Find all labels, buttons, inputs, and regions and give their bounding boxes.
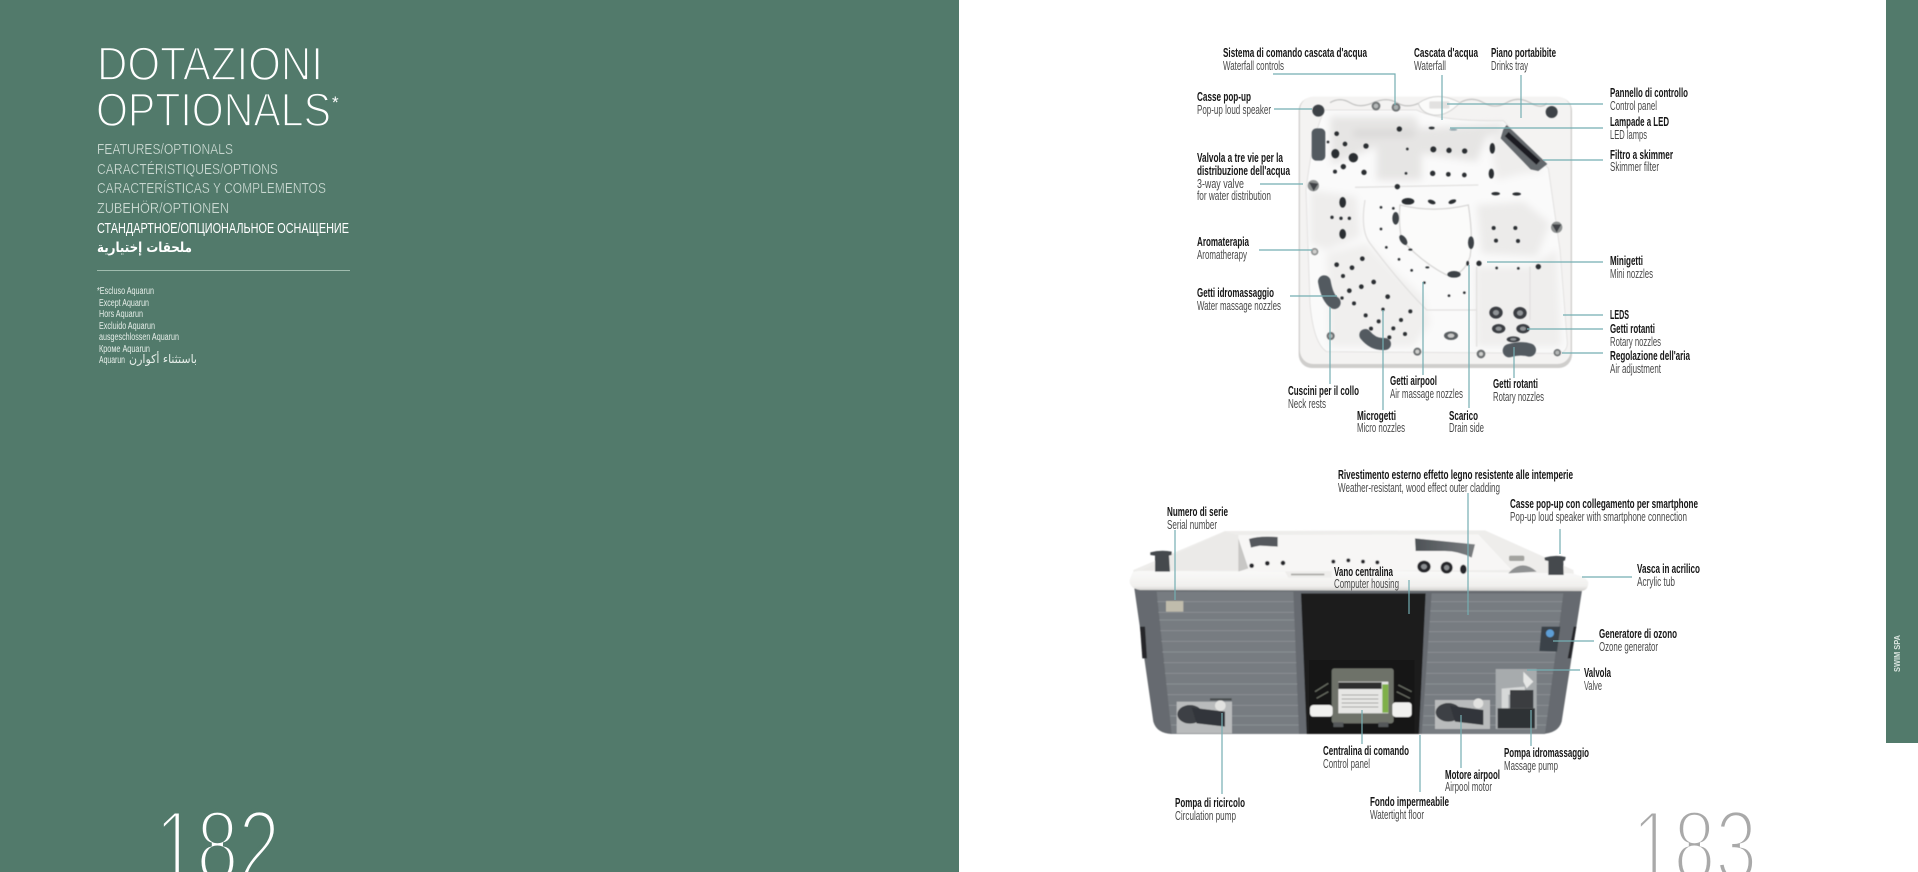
callout: Aromaterapia: Aromaterapia [1197, 235, 1250, 249]
callout: Cuscini per il collo: Cuscini per il collo [1288, 384, 1359, 398]
callout: Rivestimento esterno [1338, 468, 1573, 615]
callout: Aromaterapia [1197, 235, 1312, 262]
callout: Getti airpool: Air massage nozzles [1390, 387, 1463, 401]
callout: Getti rotanti bottom [1493, 347, 1544, 404]
callout: Rivestimento esterno: Weather-resistant, wood effect outer cladding [1338, 481, 1500, 495]
callout: Centralina di comando [1323, 710, 1409, 771]
cabinet body [1134, 588, 1582, 734]
subtitle translations: ZUBEHÖR/OPTIONEN [97, 199, 229, 217]
callout: Casse pop-up: Pop-up loud speaker [1197, 103, 1271, 117]
subtitle translations: CARACTÉRISTIQUES/OPTIONS [97, 161, 278, 178]
callout: Cascata d'acqua: Waterfall [1414, 59, 1446, 73]
callout: Getti idromassaggio [1197, 286, 1337, 313]
callout: Regolazione dell'aria: Air adjustment [1610, 362, 1661, 376]
callout: Cascata d'acqua: Cascata d'acqua [1414, 46, 1479, 60]
footnote: exclusions: Hors Aquarun [99, 309, 143, 320]
callout: Generatore di ozono [1553, 627, 1677, 654]
callout: Fondo impermeabile: Watertight floor [1370, 808, 1424, 822]
callout: Centralina di comando: Centralina di comando [1323, 744, 1409, 758]
callout: Scarico: Scarico [1449, 409, 1478, 423]
pump photo right [1435, 700, 1490, 729]
callout: Rivestimento esterno: Rivestimento esterno effetto legno resistente alle intemperie [1338, 468, 1573, 482]
title: OPTIONALS [96, 83, 331, 136]
callout: Piano portabibite: Drinks tray [1491, 59, 1528, 73]
callout: Microgetti: Micro nozzles [1357, 421, 1405, 435]
pop-up speakers and fittings [1308, 101, 1562, 358]
callout: Casse pop-up: Casse pop-up [1197, 90, 1251, 104]
spa top surface [1133, 530, 1575, 582]
footnote: exclusions: Кроме Aquarun [99, 344, 150, 355]
callout: Pompa idromassaggio [1504, 710, 1589, 773]
callout: Piano portabibite: Piano portabibite [1491, 46, 1556, 60]
pump photo left [1177, 702, 1232, 733]
side view of spa [1130, 530, 1588, 734]
callout: Pannello di controllo: Control panel [1610, 99, 1657, 113]
subtitle translations [97, 141, 349, 256]
callout: Numero di serie: Numero di serie [1167, 505, 1228, 519]
callout: Valvola a tre vie: 3-way valve [1197, 177, 1244, 191]
title: DOTAZIONI [97, 37, 323, 90]
callout: Minigetti [1487, 254, 1653, 281]
callout: Vano centralina [1334, 565, 1409, 614]
callout: Scarico: Drain side [1449, 421, 1484, 435]
subtitle translations: CARACTERÍSTICAS Y COMPLEMENTOS [97, 180, 326, 197]
callout: Minigetti: Minigetti [1610, 254, 1643, 268]
callout: Getti airpool: Getti airpool [1390, 374, 1437, 388]
callout: Cuscini per il collo: Neck rests [1288, 397, 1326, 411]
callout: Valvola a tre vie: for water distribution [1197, 189, 1271, 203]
callout: Getti airpool [1390, 282, 1463, 401]
callout: Valvola a tre vie [1197, 151, 1303, 203]
tub seats shading [1310, 117, 1562, 347]
footnote: exclusions: Except Aquarun [99, 298, 149, 309]
callout: Pompa di ricircolo: Pompa di ricircolo [1175, 796, 1245, 810]
compartment opening [1301, 593, 1426, 734]
neck rests and skimmer [1312, 125, 1547, 351]
subtitle translations: ملحقات إختيارية [97, 240, 192, 256]
footnote: exclusions [97, 286, 197, 367]
callout: Sistema di comando cascata d'acqua: Sistema di comando cascata d'acqua [1223, 46, 1368, 60]
footnote: exclusions: *Escluso Aquarun [97, 286, 154, 297]
callout: Microgetti [1357, 310, 1405, 435]
control unit [1332, 668, 1394, 723]
callout: Filtro a skimmer: Filtro a skimmer [1610, 148, 1673, 162]
callout: Getti rotanti right [1527, 322, 1661, 349]
callout: Pompa idromassaggio: Pompa idromassaggio [1504, 746, 1589, 760]
callout: Lampade a LED: Lampade a LED [1610, 115, 1669, 129]
callout: Generatore di ozono: Ozone generator [1599, 640, 1658, 654]
callout: Vasca in acrilico: Vasca in acrilico [1637, 562, 1700, 576]
callout: Casse pop-up con collegamento per smartphone [1510, 497, 1698, 554]
callout: Vano centralina: Vano centralina [1334, 565, 1394, 579]
subtitle translations: СТАНДАРТНОЕ/ОПЦИОНАЛЬНОЕ ОСНАЩЕНИЕ [97, 221, 349, 237]
footnote: exclusions: Excluido Aquarun [99, 321, 155, 332]
callout: LEDS [1563, 308, 1629, 322]
callout: Vasca in acrilico: Acrylic tub [1637, 575, 1675, 589]
footnote: exclusions: ausgeschlossen Aquarun [99, 332, 179, 343]
callout: Generatore di ozono: Generatore di ozono [1599, 627, 1677, 641]
callout: Motore airpool: Airpool motor [1445, 780, 1492, 794]
callout: Numero di serie [1167, 505, 1228, 600]
massage jets [1327, 126, 1541, 339]
callout: Regolazione dell'aria: Regolazione dell'aria [1610, 349, 1691, 363]
callout: Getti idromassaggio: Getti idromassaggio [1197, 286, 1274, 300]
callout: Vasca in acrilico [1582, 562, 1700, 589]
callout: Filtro a skimmer [1543, 148, 1673, 174]
callout: Lampade a LED [1450, 115, 1669, 142]
callout: Casse pop-up con collegamento per smartphone: Casse pop-up con collegamento per smartphone [1510, 497, 1698, 511]
callout: Fondo impermeabile: Fondo impermeabile [1370, 795, 1449, 809]
callout: Filtro a skimmer: Skimmer filter [1610, 160, 1659, 174]
callout: Getti rotanti bottom: Rotary nozzles [1493, 390, 1544, 404]
panel: left green page [0, 0, 959, 872]
callout: Cuscini per il collo [1288, 307, 1359, 411]
callout: Motore airpool: Motore airpool [1445, 768, 1500, 782]
callout: Valvola: Valve [1584, 679, 1602, 693]
callout: LEDS: LEDS [1610, 308, 1629, 322]
callout: Numero di serie: Serial number [1167, 518, 1217, 532]
callout: Minigetti: Mini nozzles [1610, 267, 1653, 281]
callout: Fondo impermeabile [1370, 735, 1449, 822]
callout: Valvola [1527, 666, 1612, 693]
left panel [1157, 592, 1299, 734]
callout: Motore airpool [1445, 715, 1500, 794]
ozone generator [1539, 627, 1560, 652]
callout: Piano portabibite [1491, 46, 1556, 118]
callout: Casse pop-up [1197, 90, 1312, 117]
callout: Regolazione dell'aria [1562, 349, 1691, 376]
callout: Lampade a LED: LED lamps [1610, 128, 1647, 142]
callout: Vano centralina: Computer housing [1334, 577, 1399, 591]
callout: Valvola a tre vie: Valvola a tre vie per la [1197, 151, 1284, 165]
callout: Getti rotanti bottom: Getti rotanti [1493, 377, 1538, 391]
callout: Getti rotanti right: Rotary nozzles [1610, 335, 1661, 349]
callout: Pompa di ricircolo: Circulation pump [1175, 809, 1236, 823]
callout: Pompa di ricircolo [1175, 713, 1245, 823]
subtitle translations: FEATURES/OPTIONALS [97, 141, 233, 158]
callout: Pannello di controllo: Pannello di controllo [1610, 86, 1688, 100]
callout: Aromaterapia: Aromatherapy [1197, 248, 1247, 262]
panel: side tab [1886, 0, 1918, 743]
callout: Getti rotanti right: Getti rotanti [1610, 322, 1655, 336]
foot well [1399, 205, 1471, 275]
panel: side tab: SWIM SPA [1892, 635, 1902, 672]
callout: Casse pop-up con collegamento per smartphone: Pop-up loud speaker with smartphone connection [1510, 510, 1687, 524]
callout: Centralina di comando: Control panel [1323, 757, 1370, 771]
speakers [1150, 551, 1172, 572]
footnote: exclusions: باستثناء أكوارن [129, 351, 197, 367]
massage pump and valve photo [1496, 669, 1537, 729]
serial plate [1166, 601, 1183, 612]
callout: Sistema di comando cascata d'acqua [1223, 46, 1395, 105]
right panel [1422, 593, 1563, 734]
callout: Pompa idromassaggio: Massage pump [1504, 759, 1558, 773]
callout: Valvola: Valvola [1584, 666, 1612, 680]
callout: Scarico [1449, 265, 1484, 435]
callout: Microgetti: Microgetti [1357, 409, 1396, 423]
rotary jets [1489, 307, 1530, 342]
callout: Cascata d'acqua [1414, 46, 1479, 120]
title: * [332, 93, 339, 112]
callout: Valvola a tre vie: distribuzione dell'acqua [1197, 164, 1291, 178]
title [96, 37, 339, 136]
footnote: exclusions: Aquarun [99, 355, 125, 366]
callout: Getti idromassaggio: Water massage nozzles [1197, 299, 1281, 313]
jets [1249, 558, 1467, 574]
callout: Pannello di controllo [1447, 86, 1688, 113]
rim [1130, 570, 1588, 591]
top view of spa tub [1299, 96, 1572, 368]
callout: Sistema di comando cascata d'acqua: Waterfall controls [1223, 59, 1284, 73]
neck rests [1249, 537, 1278, 548]
